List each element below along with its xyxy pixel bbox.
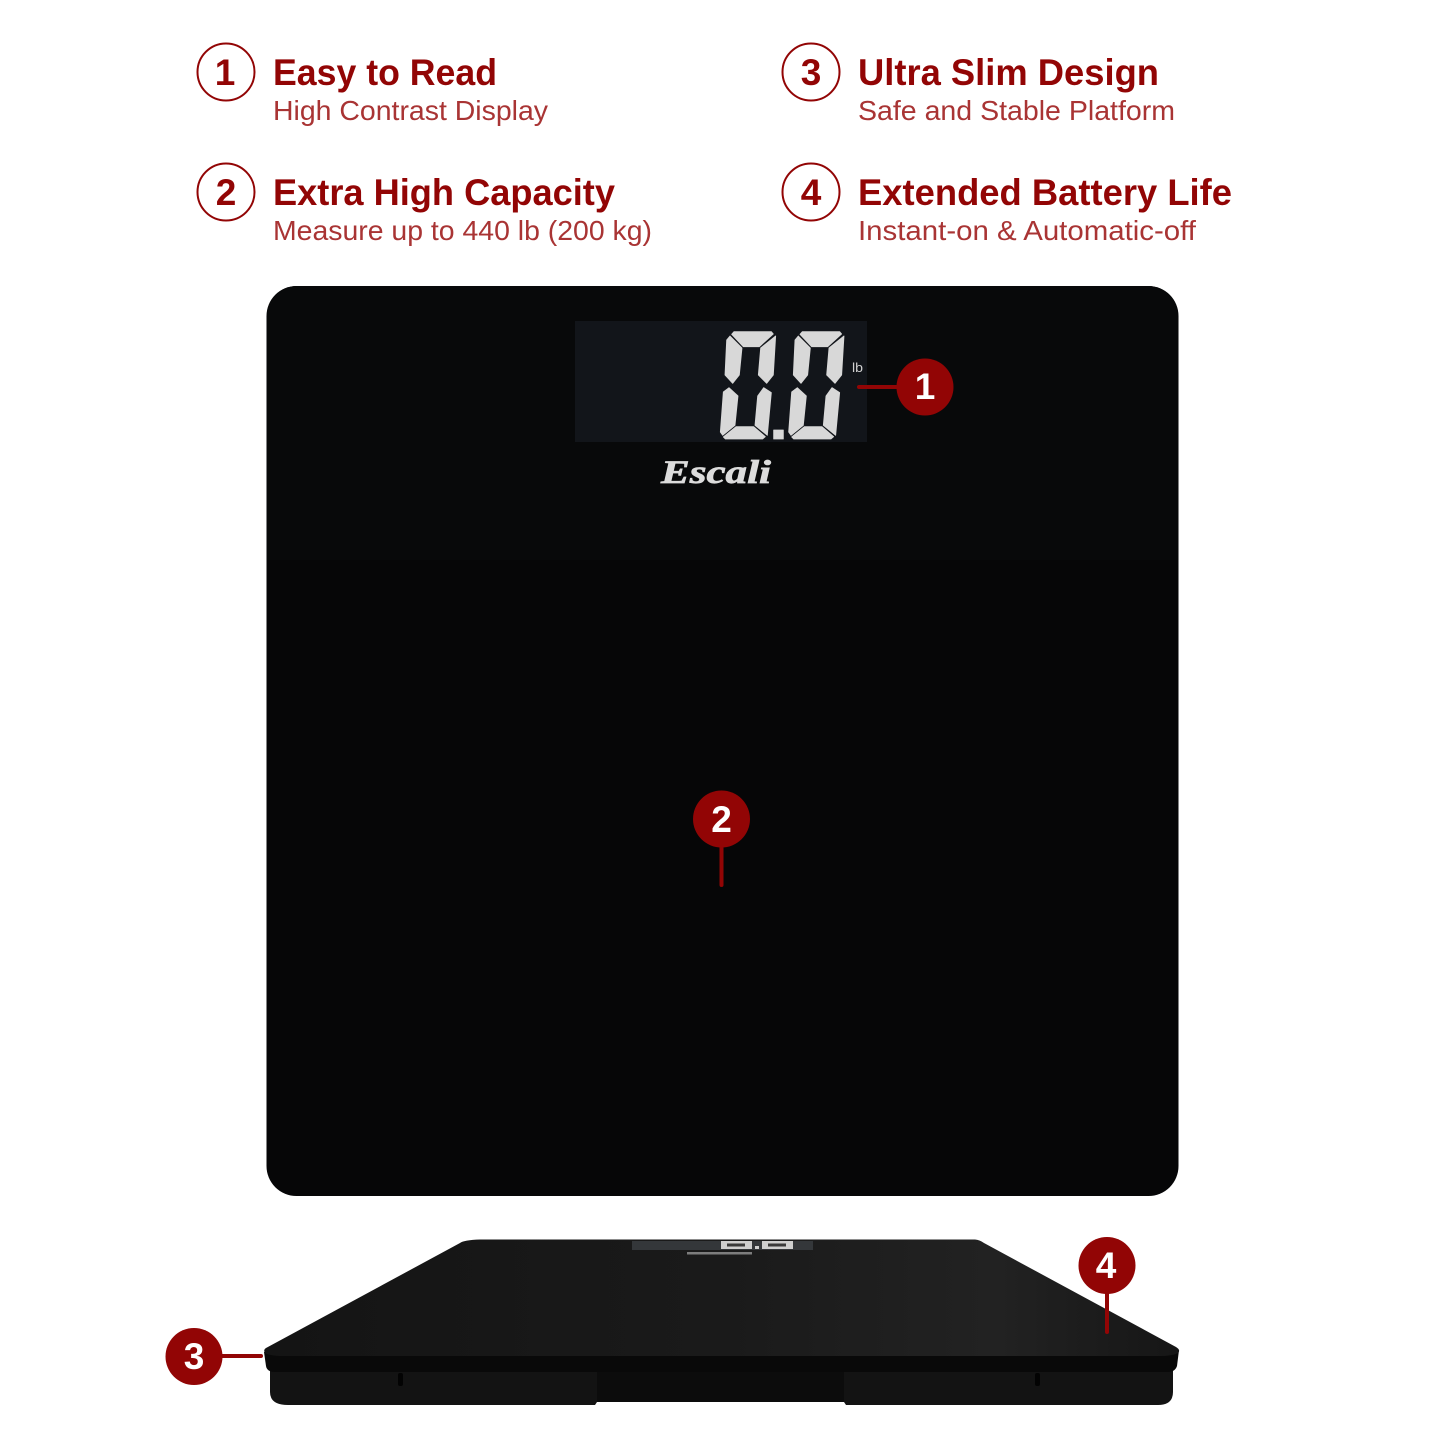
LCD reading 0.0 [720, 332, 844, 439]
feature 4: extended battery life: Instant-on & Automatic-off [858, 215, 1196, 246]
marker 1: 1 [915, 366, 935, 407]
front edge [264, 1350, 1179, 1372]
LCD display [575, 321, 867, 442]
marker 3: 3 [184, 1336, 204, 1377]
feature 2: extra high capacity: Measure up to 440 lb (200 kg) [273, 215, 652, 246]
feature 2: extra high capacity: Extra High Capacity [273, 172, 615, 213]
base [270, 1368, 1173, 1405]
feature 1: easy to read: Easy to Read [273, 52, 497, 93]
marker 3 [166, 1328, 261, 1385]
feature 4: extended battery life: 4 [801, 172, 822, 213]
feature 4: extended battery life: Extended Battery Life [858, 172, 1232, 213]
unit label: lb [852, 360, 863, 375]
feature 3: ultra slim design: Safe and Stable Platform [858, 95, 1175, 126]
feet notches [398, 1373, 403, 1386]
feature 1: easy to read [198, 44, 548, 126]
feature 1: easy to read: High Contrast Display [273, 95, 548, 126]
feature 2: extra high capacity [198, 164, 652, 246]
marker 4 [1078, 1237, 1136, 1332]
marker 4: 4 [1096, 1245, 1117, 1286]
feature 2: extra high capacity: 2 [216, 172, 236, 213]
marker 2: 2 [711, 799, 732, 840]
feature 1: easy to read: 1 [215, 52, 235, 93]
marker 2 [693, 790, 750, 885]
scale side view [264, 1240, 1179, 1405]
feature 4: extended battery life [782, 164, 1232, 246]
feature 3: ultra slim design: 3 [801, 52, 821, 93]
top face [264, 1240, 1179, 1356]
Escali logo: Escali [660, 455, 772, 491]
scale top view [266, 286, 1178, 1196]
feature 3: ultra slim design [782, 44, 1175, 126]
marker 1 [859, 358, 954, 416]
mini display [632, 1241, 813, 1254]
feature 3: ultra slim design: Ultra Slim Design [858, 52, 1159, 93]
